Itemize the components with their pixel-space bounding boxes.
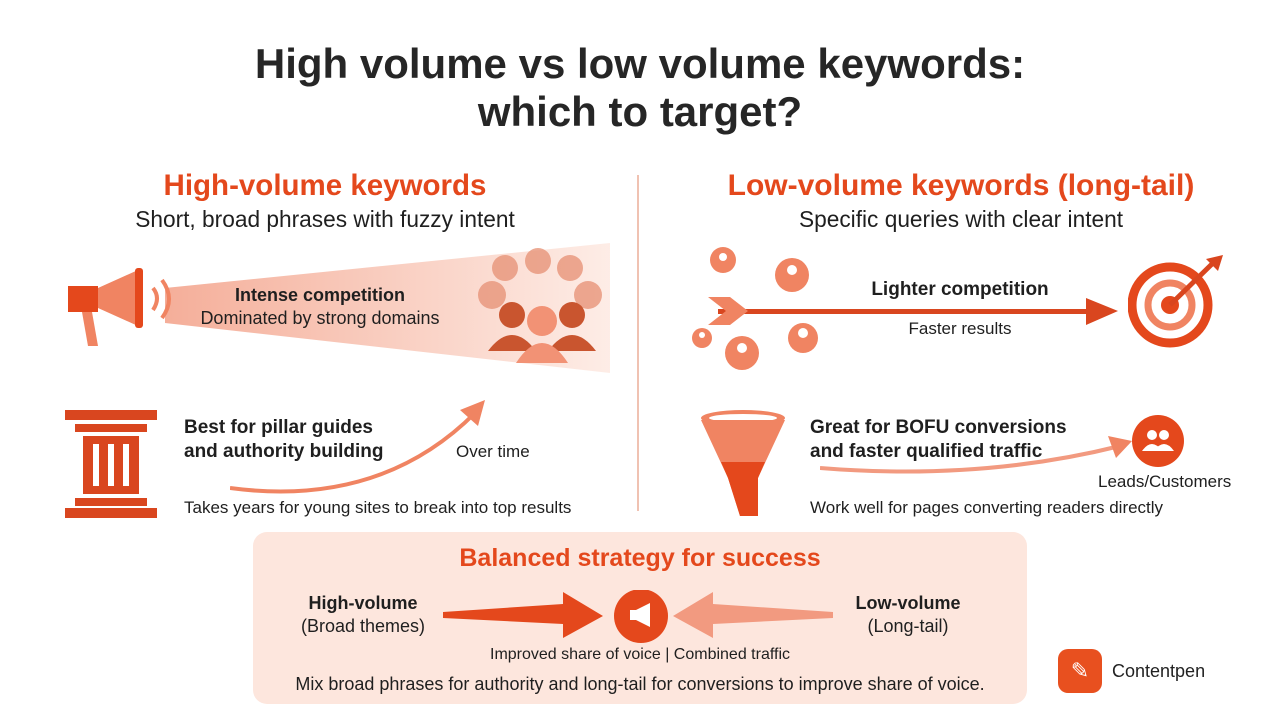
logo: Contentpen: Contentpen xyxy=(1112,661,1205,681)
logo: Contentpen xyxy=(1058,649,1205,693)
text: BOFU: and faster qualified traffic xyxy=(810,441,1042,462)
text: intense competition: Intense competition xyxy=(235,285,405,305)
text: pillar guides xyxy=(184,417,383,462)
logo: Contentpen: ✎ xyxy=(1071,658,1089,683)
heading: high-volume: High-volume keywords xyxy=(164,169,486,202)
panel: low-volume xyxy=(692,169,1231,517)
text: low-volume: Low-volume xyxy=(855,593,960,613)
icon: pillar xyxy=(65,410,157,518)
icon: target xyxy=(1128,255,1223,348)
icon: leads xyxy=(1132,415,1184,467)
text: mix: Mix broad phrases for authority and long-tail for conversions to improve share of voice. xyxy=(295,674,985,694)
title xyxy=(255,40,1025,135)
title: High volume vs low volume keywords: xyxy=(255,40,1025,87)
text: intense competition: Dominated by strong domains xyxy=(200,308,440,328)
text: over time: Over time xyxy=(456,442,530,461)
arrows: converging xyxy=(443,590,833,643)
subtitle: Short, broad phrases with fuzzy intent xyxy=(135,206,515,232)
panel: high-volume xyxy=(65,169,610,518)
text: BOFU xyxy=(810,417,1067,462)
text: low-volume: (Long-tail) xyxy=(867,616,949,636)
text: high-volume: High-volume xyxy=(308,593,418,613)
arrow: curve to leads xyxy=(820,436,1132,474)
panel: balanced strategy xyxy=(253,532,1027,704)
icon: funnel xyxy=(701,410,785,516)
text: BOFU: Great for BOFU conversions xyxy=(810,417,1067,438)
icon: user circles xyxy=(692,247,818,370)
text: pillar guides: and authority building xyxy=(184,441,383,462)
subtitle: Specific queries with clear intent xyxy=(799,206,1123,232)
icon: megaphone with beam and crowd xyxy=(68,243,610,373)
text: high-volume xyxy=(301,593,425,636)
arrow: long arrow to target xyxy=(708,297,1118,325)
text: low-volume xyxy=(855,593,960,636)
heading: low-volume: Low-volume keywords (long-tail) xyxy=(728,169,1194,202)
arrow: growth curve xyxy=(230,400,485,494)
text: intense competition xyxy=(200,285,440,328)
text: work well: Work well for pages converting readers directly xyxy=(810,498,1163,517)
text: lighter competition: Lighter competition xyxy=(871,279,1049,300)
text: takes years: Takes years for young sites to break into top results xyxy=(184,498,571,517)
title: which to target? xyxy=(478,88,802,135)
text: pillar guides: Best for pillar guides xyxy=(184,417,373,438)
text: high-volume: (Broad themes) xyxy=(301,616,425,636)
text: improved share: Improved share of voice | Combined traffic xyxy=(490,646,790,663)
divider xyxy=(637,175,639,511)
heading: balanced: Balanced strategy for success xyxy=(459,544,821,572)
text: leads/customers: Leads/Customers xyxy=(1098,472,1231,491)
text: faster results: Faster results xyxy=(908,319,1011,338)
